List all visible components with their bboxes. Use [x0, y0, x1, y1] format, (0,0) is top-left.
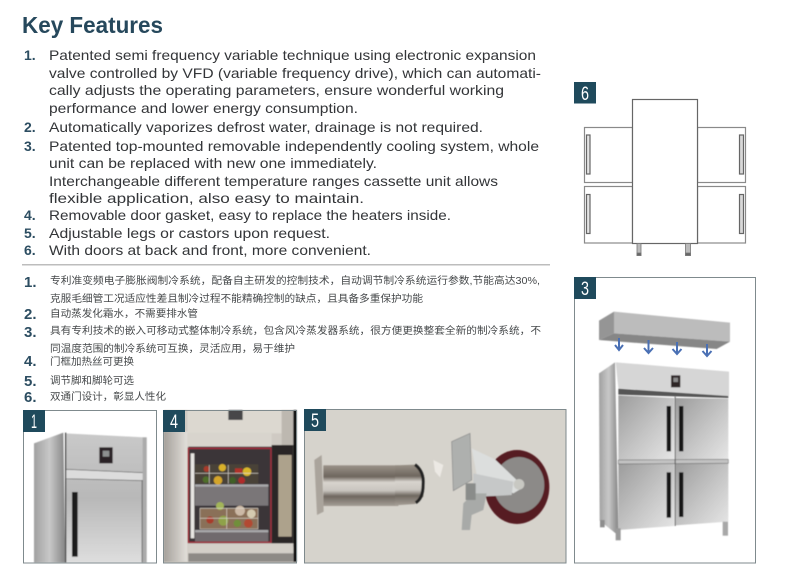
English feature list [24, 47, 541, 258]
feature 3: Patented top-mounted removable independently cooling system, whole [49, 138, 539, 154]
left and right doors [584, 128, 746, 243]
feature 2: Automatically vaporizes defrost water, drainage is not required. [49, 119, 483, 135]
upper basket of peppers [195, 464, 258, 484]
中文 6: 双通门设计，彰显人性化 [50, 390, 166, 403]
feature 1: performance and lower energy consumption. [49, 100, 358, 116]
feature 1: Patented semi frequency variable technique using electronic expansion [49, 47, 536, 63]
feature 6: 6. [24, 242, 36, 258]
badge 5: 5 [311, 411, 319, 432]
中文 4: 4. [24, 353, 37, 370]
badge 3: 3 [581, 279, 589, 300]
中文 5 [24, 373, 134, 390]
中文 1: 1. [24, 274, 37, 291]
中文 4 [24, 353, 134, 370]
feature 1: cally adjusts the operating parameters, ensure wonderful working [49, 82, 504, 98]
badge 3 [574, 277, 596, 300]
badge 1: 1 [31, 412, 37, 433]
feature 3: unit can be replaced with new one immediately. [49, 155, 377, 171]
arrows down [615, 338, 712, 356]
feature 6: With doors at back and front, more convenient. [49, 242, 371, 258]
lower basket of vegetables [200, 508, 258, 529]
中文 3: 具有专利技术的嵌入可移动式整体制冷系统，包含风冷蒸发器系统，很方便更换整套全新的制冷系统，不 [50, 324, 541, 337]
中文 6 [24, 389, 166, 406]
feature 2: 2. [24, 119, 36, 135]
cooling cassette [599, 312, 730, 349]
feature 3: flexible application, also easy to maintain. [49, 190, 364, 206]
panel 3: cassette cooling unit above four door cabinet [574, 277, 756, 563]
badge 5 [304, 409, 326, 432]
panel 5: adjustable leg and castor photo [304, 409, 566, 563]
中文 3 [24, 324, 541, 355]
中文 5: 5. [24, 373, 37, 390]
feature 3: 3. [24, 138, 36, 154]
feature 1: 1. [24, 47, 36, 63]
feature 3 [24, 138, 539, 206]
中文 1: 专利准变频电子膨胀阀制冷系统，配备自主研发的控制技术，自动调节制冷系统运行参数,节能高达30%, [50, 274, 540, 287]
中文 2: 2. [24, 306, 37, 323]
中文 1 [24, 274, 540, 305]
中文 2 [24, 306, 198, 323]
中文 4: 门框加热丝可更换 [50, 355, 134, 368]
panel 1: single door cabinet photo [23, 410, 156, 563]
feature 5: 5. [24, 225, 36, 241]
title: Key Features [22, 12, 163, 38]
中文 1: 克服毛细管工况适应性差且制冷过程不能精确控制的缺点，且具备多重保护功能 [50, 292, 423, 305]
badge 1 [23, 410, 45, 433]
中文 6: 6. [24, 389, 37, 406]
feature 5: Adjustable legs or castors upon request. [49, 225, 330, 241]
中文 2: 自动蒸发化霜水，不需要排水管 [50, 307, 198, 320]
cabinet feet [637, 244, 690, 256]
中文 5: 调节脚和脚轮可选 [50, 374, 134, 387]
panel 4: open door with gasket photo [163, 410, 297, 563]
feature 3: Interchangeable different temperature ranges cassette unit allows [49, 173, 498, 189]
中文 3: 同温度范围的制冷系统可互换，灵活应用，易于维护 [50, 342, 295, 355]
feature 1 [24, 47, 541, 116]
panel 6: line drawing of pass-through cabinet [574, 82, 746, 256]
central cabinet body [632, 100, 698, 244]
badge 6: 6 [581, 84, 589, 105]
four door cabinet [599, 362, 729, 540]
feature 4: 4. [24, 207, 36, 223]
feature 1: valve controlled by VFD (variable frequency drive), which can automati- [49, 65, 541, 81]
badge 4: 4 [170, 412, 178, 433]
badge 4 [163, 410, 185, 433]
feature 4: Removable door gasket, easy to replace the heaters inside. [49, 207, 451, 223]
中文 3: 3. [24, 324, 37, 341]
badge 6 [574, 82, 596, 105]
Chinese feature list [24, 274, 541, 406]
